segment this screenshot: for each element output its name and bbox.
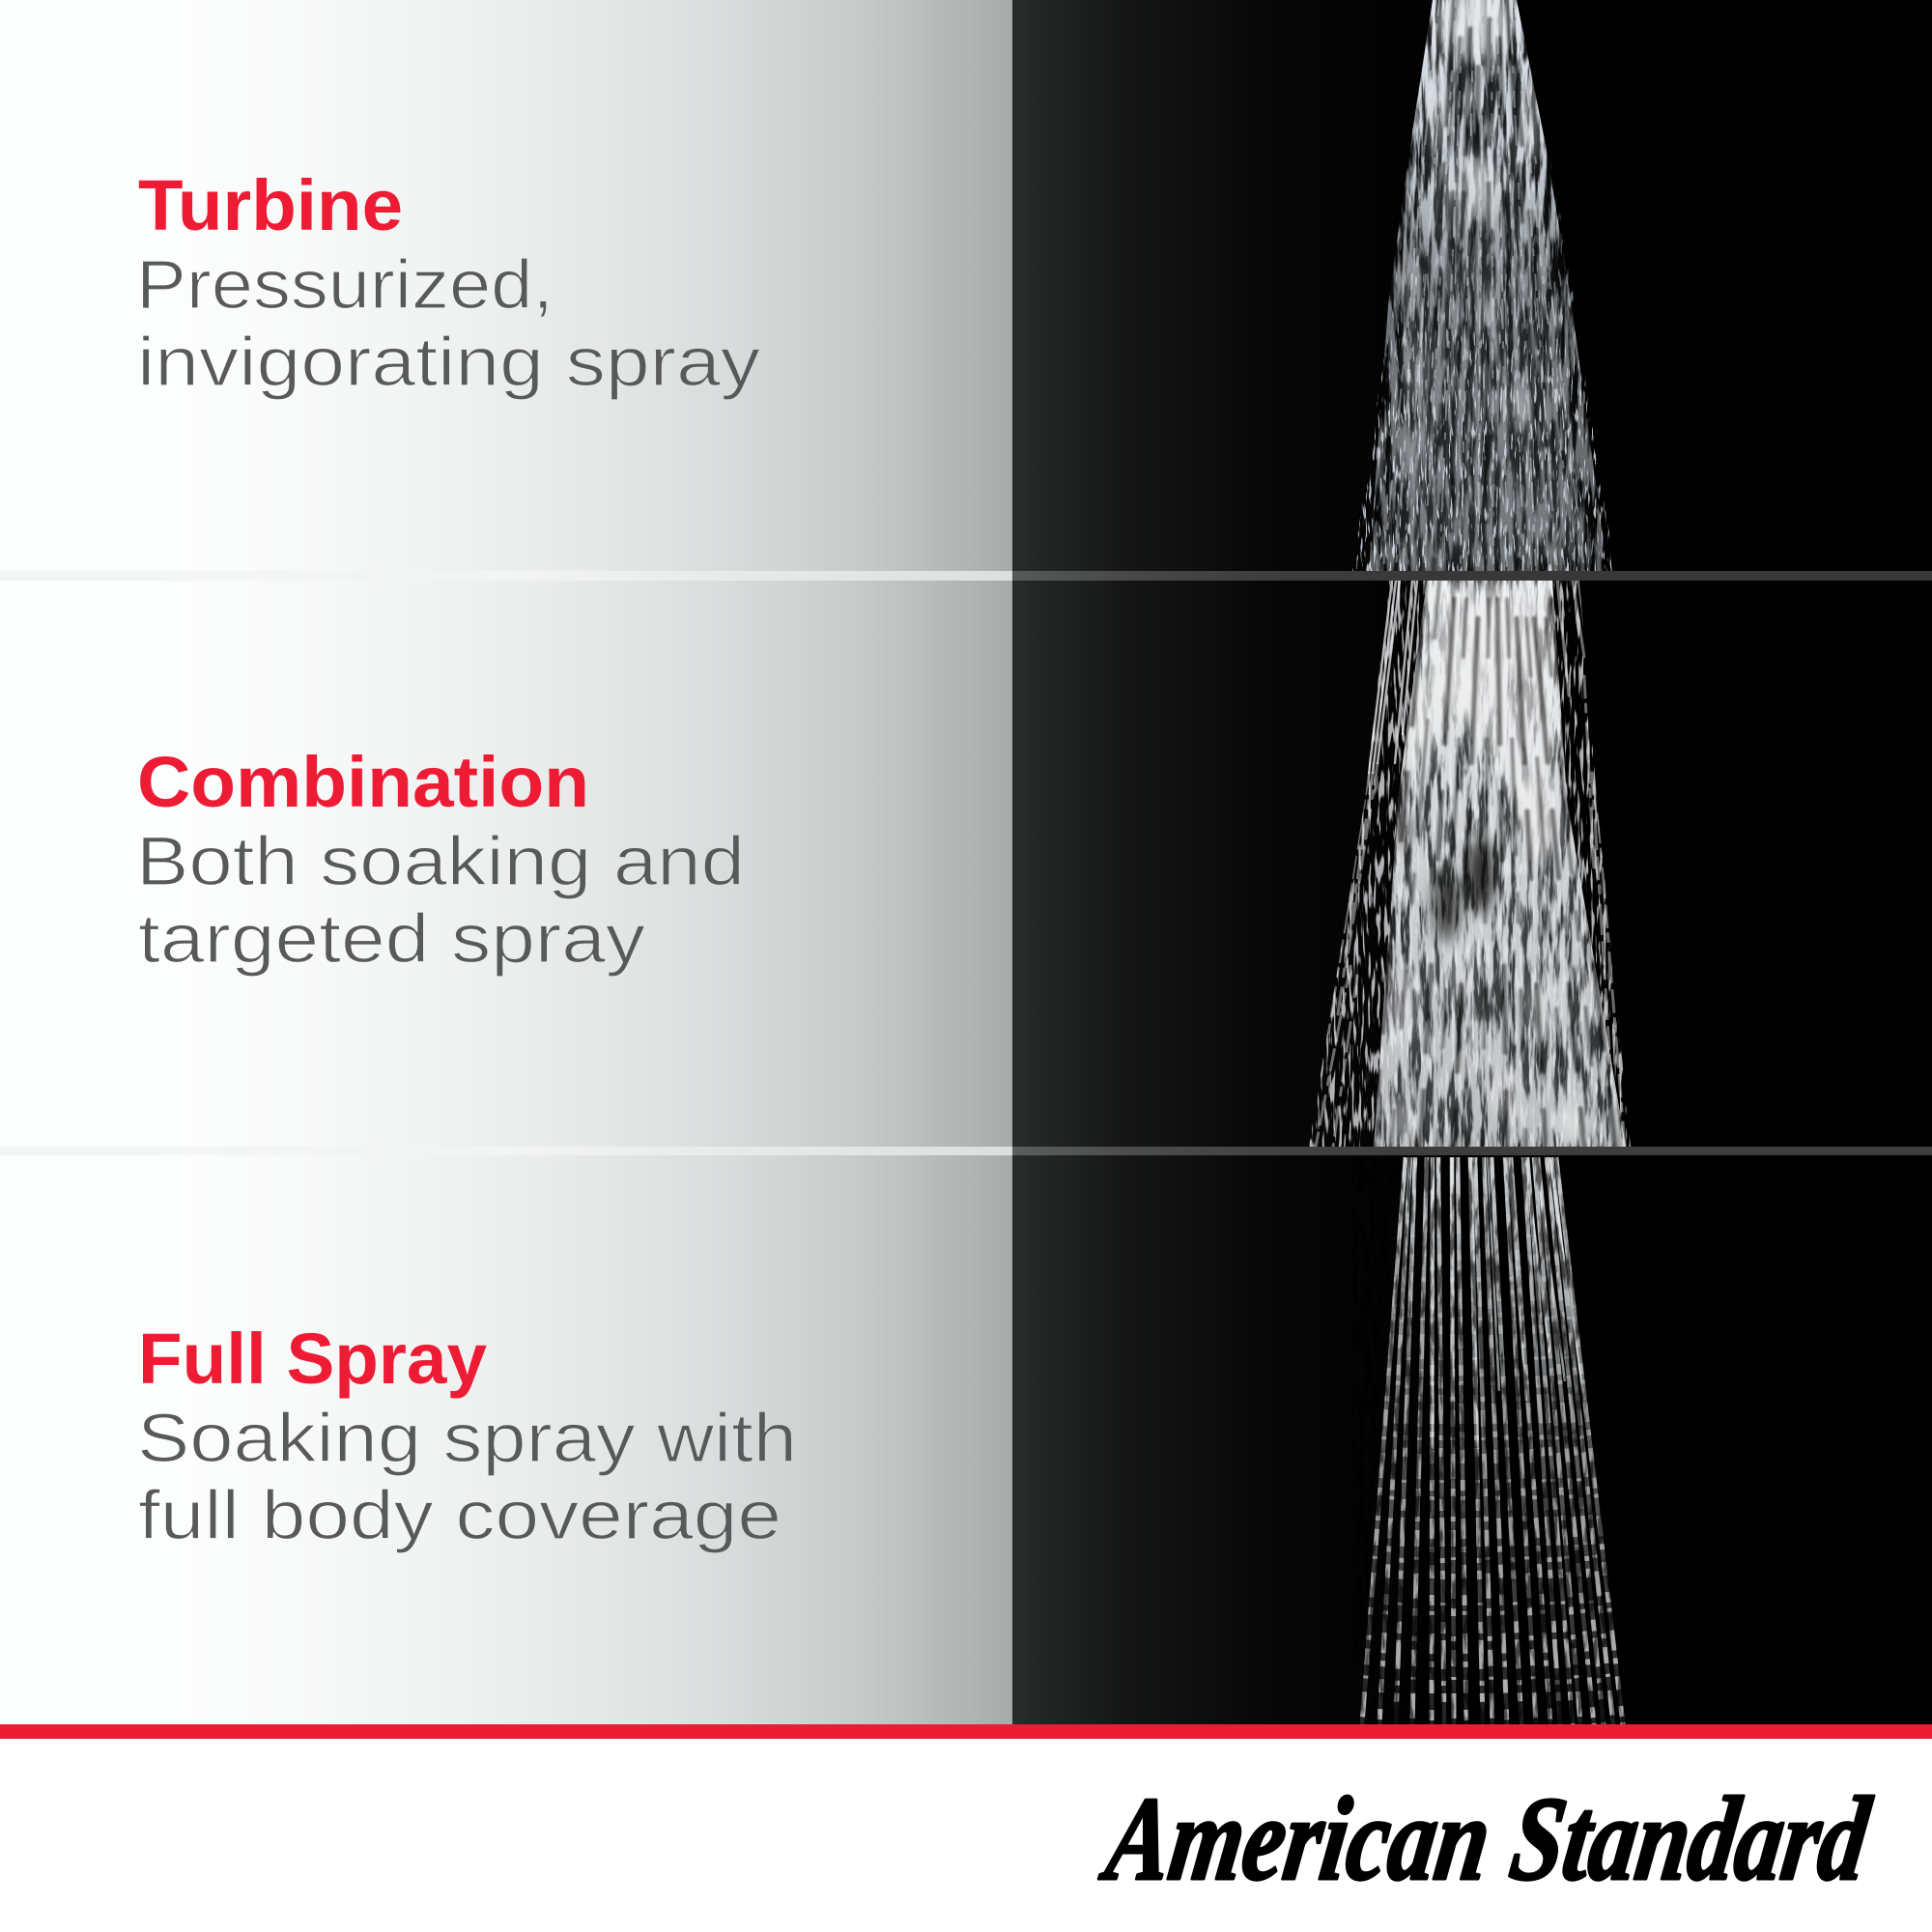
description: Full Spray: full body coverage: [138, 1478, 781, 1554]
text block: Combination: [136, 742, 745, 978]
divider: upper: [0, 571, 1932, 581]
description: Combination: targeted spray: [138, 901, 646, 978]
description: Turbine: invigorating spray: [137, 325, 761, 401]
spray: full spray: [1352, 1157, 1642, 1724]
red footer rule: [0, 1724, 1932, 1739]
text block: Turbine: [136, 165, 761, 401]
description: Turbine: [136, 247, 761, 401]
description: Combination: Both soaking and: [136, 824, 745, 900]
heading: Combination: Combination: [137, 742, 589, 822]
text block: Full Spray: [137, 1319, 797, 1554]
heading: Turbine: Turbine: [138, 165, 403, 245]
description: Full Spray: Soaking spray with: [137, 1401, 797, 1477]
right dark panel: [1012, 0, 1932, 1724]
spray: combination: [1294, 581, 1642, 1147]
description: Combination: [136, 824, 745, 978]
divider: lower: [0, 1147, 1932, 1155]
left gradient panel: [0, 0, 1012, 1724]
description: Full Spray: [137, 1401, 797, 1554]
heading: Full Spray: Full Spray: [138, 1319, 487, 1399]
spray: turbine: [1352, 0, 1612, 571]
description: Turbine: Pressurized,: [136, 247, 554, 324]
